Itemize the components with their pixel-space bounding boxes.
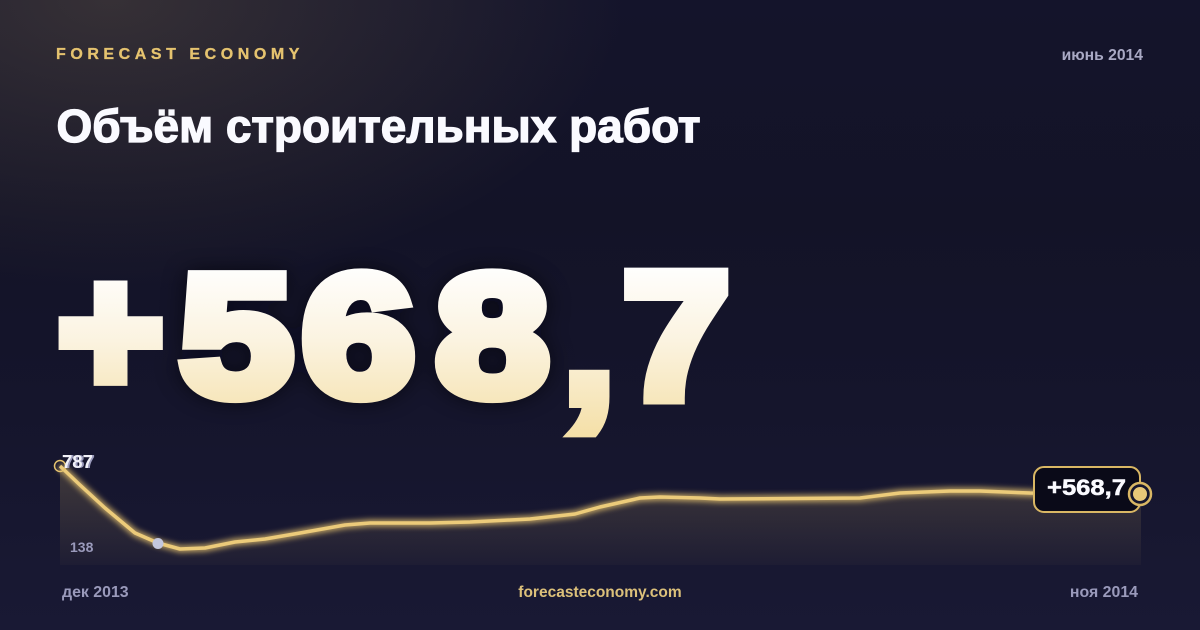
end marker bbox=[1129, 483, 1151, 505]
min label: 138 bbox=[70, 539, 94, 555]
start date label: дек 2013 bbox=[62, 584, 129, 601]
date label: июнь 2014 bbox=[1062, 47, 1143, 64]
min marker bbox=[152, 538, 164, 549]
hero value bbox=[58, 231, 730, 444]
start marker bbox=[54, 460, 66, 472]
max label: 787 bbox=[62, 451, 93, 472]
source url: forecasteconomy.com bbox=[518, 584, 682, 601]
chart area fill bbox=[60, 466, 1141, 565]
brand label: FORECAST ECONOMY bbox=[56, 46, 304, 63]
end date label: ноя 2014 bbox=[1070, 584, 1138, 601]
line glow bbox=[60, 466, 1140, 549]
hero value: + bbox=[58, 231, 163, 432]
hero value: 7 bbox=[623, 235, 730, 437]
hero value: , bbox=[560, 232, 618, 444]
sparkline chart bbox=[54, 451, 1151, 565]
max label: 787 bbox=[64, 451, 95, 472]
value callout: +568,7 bbox=[1047, 475, 1126, 500]
hero value: 568 bbox=[180, 240, 549, 432]
line bbox=[60, 466, 1140, 549]
value callout bbox=[1034, 467, 1140, 512]
title: Объём строительных работ bbox=[56, 100, 700, 152]
hero value: 568 bbox=[180, 240, 549, 432]
